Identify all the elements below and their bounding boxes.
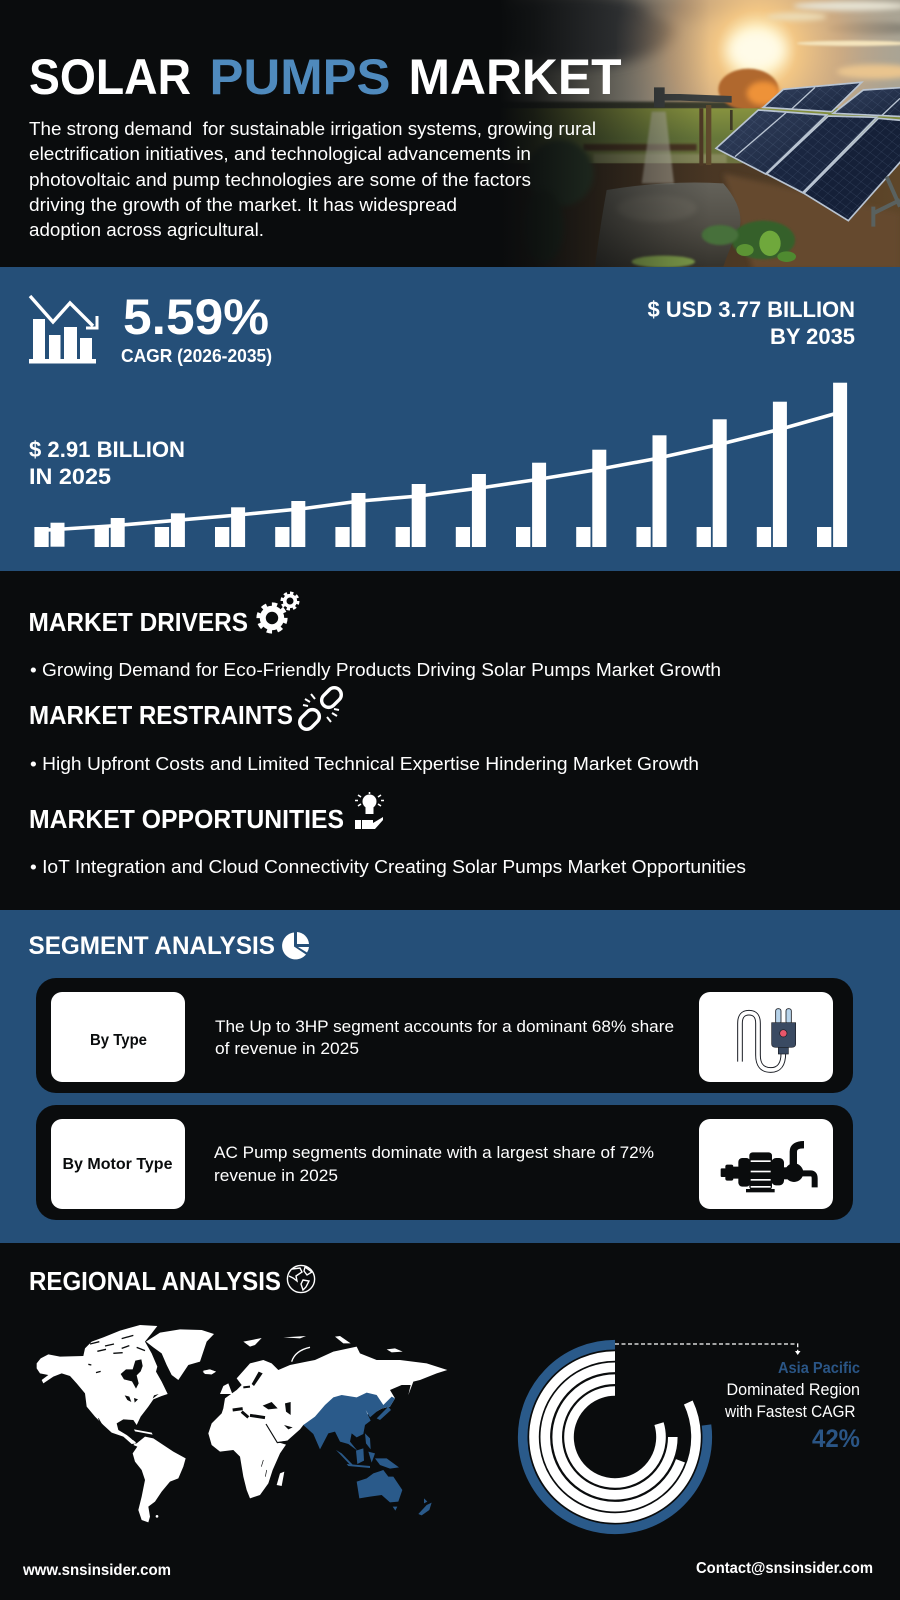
end value label: $ USD 3.77 BILLION <box>648 297 855 322</box>
label box: by motor type <box>51 1119 185 1209</box>
segment description: motor type: AC Pump segments dominate with a largest share of 72% <box>214 1143 654 1162</box>
region callout: Dominated Region <box>726 1381 860 1399</box>
start value label: $ 2.91 BILLION <box>29 437 185 462</box>
intro text: adoption across agricultural. <box>29 219 264 240</box>
start value label: IN 2025 <box>29 464 111 489</box>
footer website: www.snsinsider.com <box>22 1562 171 1579</box>
panel: segment analysis <box>0 910 900 1243</box>
heading: market drivers: MARKET DRIVERS <box>28 607 248 637</box>
icon: pie chart <box>282 932 309 959</box>
icon: gears <box>258 593 298 632</box>
icon: broken chain <box>297 685 344 732</box>
segment description: type: of revenue in 2025 <box>215 1039 359 1058</box>
intro text: driving the growth of the market. It has widespread <box>29 194 457 215</box>
heading: market opportunities: MARKET OPPORTUNITIES <box>29 804 344 834</box>
panel: market growth <box>0 267 900 571</box>
region callout: Asia Pacific <box>778 1360 860 1377</box>
segment description: type <box>215 1017 674 1058</box>
icon: electric plug and cable <box>699 992 833 1082</box>
title: SOLAR <box>29 49 191 105</box>
icon: globe <box>287 1265 315 1293</box>
panel: header <box>29 0 900 270</box>
icon: bulb in hand <box>355 792 384 829</box>
intro text: electrification initiatives, and technological advancements in <box>29 143 531 164</box>
CAGR value: 5.59% <box>123 289 269 345</box>
world map <box>37 1325 447 1522</box>
segment row: by motor type <box>36 1105 853 1220</box>
panel: regional analysis <box>29 1265 860 1529</box>
label box: by type: By Type <box>90 1032 147 1049</box>
bar chart with growth line <box>34 383 847 547</box>
segment description: motor type <box>214 1143 654 1185</box>
segment description: type: The Up to 3HP segment accounts for a dominant 68% share <box>215 1017 674 1036</box>
title <box>29 49 622 105</box>
heading: market restraints: MARKET RESTRAINTS <box>29 700 293 730</box>
header photo: solar panels and water pump <box>477 0 900 270</box>
icon: motor pump <box>699 1119 833 1209</box>
title: PUMPS <box>210 49 390 105</box>
heading: segment analysis: SEGMENT ANALYSIS <box>28 932 275 960</box>
radial bar chart <box>523 1345 707 1529</box>
segment row: by type <box>36 978 853 1093</box>
region callout <box>724 1360 860 1453</box>
CAGR label: CAGR (2026-2035) <box>121 346 272 366</box>
icon: chart with trend arrow <box>29 296 97 364</box>
region callout: 42% <box>812 1425 860 1453</box>
intro text: photovoltaic and pump technologies are some of the factors <box>29 169 531 190</box>
label box: by type <box>51 992 185 1082</box>
driver text: • Growing Demand for Eco-Friendly Products Driving Solar Pumps Market Growth <box>30 659 721 680</box>
opportunity text: • IoT Integration and Cloud Connectivity Creating Solar Pumps Market Opportunities <box>30 856 746 877</box>
footer contact: Contact@snsinsider.com <box>696 1560 873 1577</box>
label box: by motor type: By Motor Type <box>62 1156 173 1173</box>
end value label: BY 2035 <box>770 324 855 349</box>
heading: regional analysis: REGIONAL ANALYSIS <box>29 1266 281 1296</box>
panel: market dynamics <box>28 593 746 877</box>
restraint text: • High Upfront Costs and Limited Technical Expertise Hindering Market Growth <box>30 753 699 774</box>
intro text: The strong demand for sustainable irrigation systems, growing rural <box>29 118 596 139</box>
segment description: motor type: revenue in 2025 <box>214 1166 338 1185</box>
end value label <box>648 297 855 349</box>
dashed leader arrow <box>615 1344 800 1355</box>
start value label <box>29 437 185 489</box>
intro text <box>29 118 596 240</box>
region callout: with Fastest CAGR <box>724 1403 856 1421</box>
title: MARKET <box>408 49 622 105</box>
